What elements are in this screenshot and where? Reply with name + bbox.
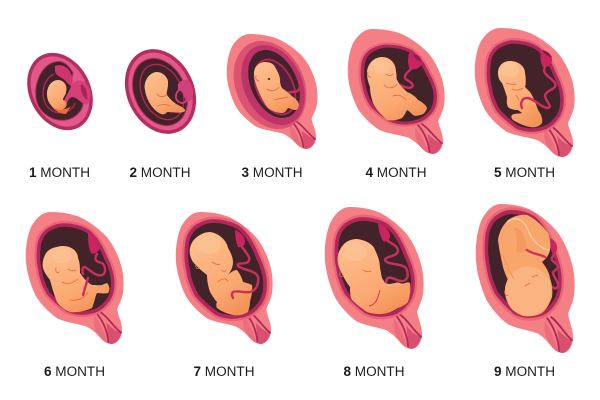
head xyxy=(505,266,551,316)
fetus xyxy=(254,62,299,113)
head highlight xyxy=(343,243,367,261)
head highlight xyxy=(501,63,519,77)
wavy inner band xyxy=(19,46,101,137)
fetus xyxy=(498,61,542,127)
uterus wall xyxy=(112,37,209,146)
stage: month 1 xyxy=(14,42,106,141)
placenta xyxy=(62,80,91,106)
wavy inner band xyxy=(116,42,205,141)
fetus detail lines xyxy=(340,270,371,277)
fetus detail lines xyxy=(196,262,228,282)
placenta xyxy=(235,230,245,247)
stage: month 5 xyxy=(475,28,575,157)
amniotic cavity xyxy=(122,50,198,134)
label: 9 month: 9 MONTH xyxy=(494,364,555,379)
label: 7 month: 7 MONTH xyxy=(194,364,254,379)
sac ring xyxy=(132,57,192,127)
embryo detail lines xyxy=(157,94,170,106)
fetus xyxy=(367,57,427,120)
fetus xyxy=(190,232,252,315)
placenta xyxy=(550,238,557,253)
cord xyxy=(232,247,258,298)
stage: month 9 xyxy=(476,204,575,353)
stage: month 6 xyxy=(26,212,124,344)
placenta xyxy=(540,50,552,67)
amniotic cavity xyxy=(488,42,562,130)
head highlight xyxy=(52,249,72,263)
face detail lines xyxy=(505,275,538,296)
cord xyxy=(400,69,413,88)
label: 6 month: 6 MONTH xyxy=(44,364,105,379)
sac ring xyxy=(43,74,75,113)
amniotic cavity xyxy=(238,42,310,126)
label: 8 month: 8 MONTH xyxy=(344,364,404,379)
amniotic cavity xyxy=(336,219,413,315)
cord xyxy=(385,241,408,289)
stage: month 4 xyxy=(348,29,445,154)
label: 2 month: 2 MONTH xyxy=(130,165,190,180)
embryo xyxy=(145,72,185,114)
sac ring xyxy=(246,53,304,121)
head highlight xyxy=(197,236,221,254)
mid wall xyxy=(220,29,320,141)
cord xyxy=(82,254,105,275)
leg shadow xyxy=(514,228,527,252)
label: 5 month: 5 MONTH xyxy=(494,165,555,180)
stage: month 3 xyxy=(220,29,320,149)
amniotic cavity xyxy=(38,225,113,313)
cord xyxy=(552,253,558,288)
yolk sac xyxy=(55,65,73,85)
hand xyxy=(83,278,88,295)
stage: month 2 xyxy=(112,37,209,146)
cord over fetus xyxy=(527,250,545,257)
placenta xyxy=(378,224,390,242)
cord xyxy=(284,81,300,93)
uterus xyxy=(176,212,273,344)
fetus xyxy=(338,239,410,314)
label: 3 month: 3 MONTH xyxy=(242,165,302,180)
fetus xyxy=(43,246,109,312)
uterus xyxy=(348,29,445,154)
amniotic cavity xyxy=(36,61,83,120)
uterus xyxy=(227,34,318,149)
uterus xyxy=(26,212,124,344)
leg highlight xyxy=(508,219,548,250)
head highlight xyxy=(372,60,390,74)
uterus wall xyxy=(14,42,106,141)
label: 4 month: 4 MONTH xyxy=(366,165,426,180)
arm shadow xyxy=(503,255,514,279)
embryo xyxy=(50,100,71,114)
stage: month 7 xyxy=(176,212,273,344)
stage: month 8 xyxy=(325,207,424,349)
amniotic cavity xyxy=(486,212,560,316)
fetus detail lines xyxy=(256,76,288,100)
placenta xyxy=(408,53,422,69)
label: 1 month: 1 MONTH xyxy=(29,165,90,180)
uterus xyxy=(475,28,575,157)
uterus xyxy=(476,204,575,353)
placenta and cord xyxy=(178,80,193,101)
amniotic cavity xyxy=(186,221,265,317)
amniotic cavity xyxy=(362,46,435,123)
fetus detail lines xyxy=(506,83,523,100)
placenta xyxy=(88,232,100,254)
cord xyxy=(521,67,555,108)
fetus detail lines xyxy=(368,72,406,100)
fetus detail lines xyxy=(56,268,88,300)
fetus xyxy=(498,215,552,316)
uterus xyxy=(325,207,424,349)
thick wall xyxy=(229,35,317,135)
